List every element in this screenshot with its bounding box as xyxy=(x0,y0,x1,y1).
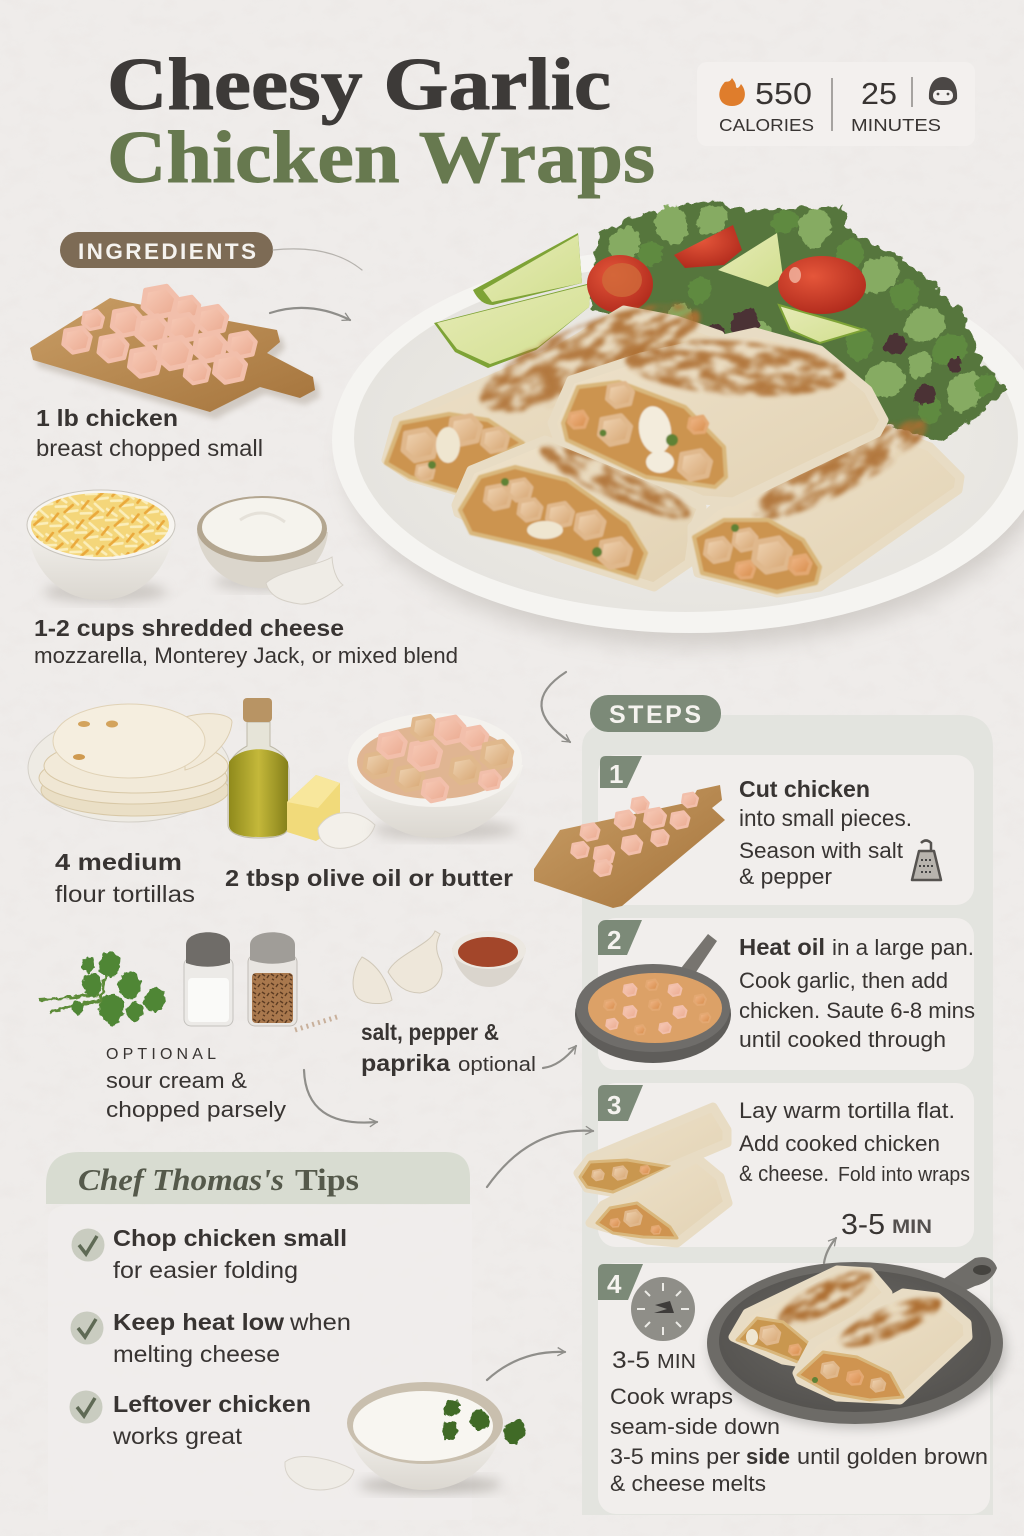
step 1 text: & pepper xyxy=(739,864,832,889)
step 2 text: Cook garlic, then add xyxy=(739,968,948,993)
label: cheese: mozzarella, Monterey Jack, or mixed blend xyxy=(34,643,458,668)
ingredients heading xyxy=(60,232,273,268)
arrow: seasoning to step 2 xyxy=(543,1046,576,1068)
step 2 text: in a large pan. xyxy=(832,935,974,960)
step 3 card xyxy=(578,1083,974,1247)
ingredient: bowl of chicken xyxy=(348,713,523,839)
wrap front right xyxy=(692,405,960,593)
label: seasoning: salt, pepper & xyxy=(361,1019,499,1045)
tips heading xyxy=(78,1162,359,1197)
wrap back centre xyxy=(552,332,884,502)
ingredient: garlic xyxy=(353,931,442,1004)
step 2 text: Heat oil xyxy=(739,934,825,960)
step 3 text: Lay warm tortilla flat. xyxy=(739,1098,955,1123)
step 1 card xyxy=(534,755,974,908)
minutes: MINUTES xyxy=(851,115,941,135)
arrow: step 4 to time xyxy=(824,1238,836,1263)
step 3 time: MIN xyxy=(892,1217,932,1238)
label: optional: sour cream & xyxy=(106,1068,247,1093)
label: seasoning xyxy=(361,1019,536,1076)
step 4 text: 3-5 mins per xyxy=(610,1444,740,1469)
arrow: chicken to plate xyxy=(270,308,350,320)
step 2 badge: 2 xyxy=(607,925,621,955)
ingredient: butter xyxy=(287,775,375,848)
tip 3: Leftover chicken xyxy=(113,1391,311,1417)
step 4 text: Cook wraps xyxy=(610,1384,733,1409)
icon: flame xyxy=(719,78,745,106)
title xyxy=(107,44,655,199)
step 2 card xyxy=(575,918,975,1070)
step 1 text xyxy=(739,776,912,889)
limes xyxy=(434,233,864,368)
ingredient: pepper shaker xyxy=(248,932,340,1030)
tips heading: Chef Thomas's xyxy=(78,1162,284,1197)
step 4 badge xyxy=(598,1264,643,1300)
label: seasoning: optional xyxy=(458,1054,536,1076)
ingredient: tortillas xyxy=(28,704,232,822)
minutes: 25 xyxy=(861,76,897,111)
step 3 text: & cheese. xyxy=(739,1161,829,1186)
ingredient: shredded cheese bowl xyxy=(27,490,175,602)
label: tortillas: 4 medium xyxy=(55,849,182,875)
step 2 pan xyxy=(575,934,731,1063)
step 2 text xyxy=(739,934,975,1052)
arrow: tips to step 4 xyxy=(487,1352,565,1380)
step 4 text: 3-5 xyxy=(612,1347,650,1374)
step 3 text xyxy=(739,1098,970,1186)
wrap back left xyxy=(386,282,720,492)
step 4 card xyxy=(598,1257,1006,1514)
label: oil or butter: 2 tbsp olive oil or butter xyxy=(225,865,513,891)
tip 2: melting cheese xyxy=(113,1341,280,1367)
salad xyxy=(590,198,1008,440)
label: seasoning: paprika xyxy=(361,1050,450,1076)
step 2 badge xyxy=(598,920,642,955)
step 3 time xyxy=(841,1209,932,1241)
step 3 text: Fold into wraps xyxy=(838,1163,970,1186)
step 3 badge xyxy=(598,1085,643,1121)
step 3 wraps xyxy=(578,1107,728,1243)
ingredient: sour cream bowl xyxy=(197,496,343,604)
step 1 badge xyxy=(600,756,642,789)
icon: chef head xyxy=(929,77,957,105)
ingredients heading: INGREDIENTS xyxy=(78,239,256,264)
calories: 550 xyxy=(755,76,812,111)
sour cream bowl with parsley xyxy=(285,1382,529,1493)
label: optional xyxy=(106,1046,286,1122)
ingredient: olive oil bottle xyxy=(228,698,289,838)
calories: CALORIES xyxy=(719,115,814,135)
label: tortillas xyxy=(55,849,195,907)
arrow: ingredients to plate xyxy=(273,249,362,270)
tomatoes xyxy=(587,225,866,314)
title: Chicken Wraps xyxy=(107,117,655,199)
wraps xyxy=(386,282,960,593)
step 4 text: MIN xyxy=(657,1351,696,1373)
tip 1 xyxy=(72,1225,347,1283)
step 4 wrap front xyxy=(797,1287,968,1400)
hero plate of wraps xyxy=(332,198,1024,647)
tips heading: Tips xyxy=(295,1162,359,1197)
label: cheese: 1-2 cups shredded cheese xyxy=(34,615,344,641)
step 1 text: Season with salt xyxy=(739,838,903,863)
steps heading xyxy=(590,695,721,732)
label: optional: OPTIONAL xyxy=(106,1046,216,1063)
step 4 text: & cheese melts xyxy=(610,1471,766,1496)
arrow: plate to steps xyxy=(541,672,570,742)
ingredient: paprika bowl xyxy=(452,931,526,987)
title: Cheesy Garlic xyxy=(107,44,611,126)
tip 1: for easier folding xyxy=(113,1257,298,1283)
steps panel xyxy=(534,695,1006,1515)
ingredient: salt shaker xyxy=(184,932,233,1026)
label: chicken xyxy=(36,405,263,461)
tip 3 xyxy=(70,1390,311,1449)
step 2 text: until cooked through xyxy=(739,1027,946,1052)
step 4 badge: 4 xyxy=(607,1269,622,1299)
step 2 text: chicken. Saute 6-8 mins xyxy=(739,998,975,1023)
step 3 time: 3-5 xyxy=(841,1209,885,1241)
step 4 text: side xyxy=(746,1444,790,1469)
tip 2 xyxy=(70,1309,351,1367)
step 4 text xyxy=(610,1347,988,1496)
label: optional: chopped parsely xyxy=(106,1097,286,1122)
label: cheese xyxy=(34,615,458,668)
step 3 badge: 3 xyxy=(607,1090,621,1120)
calories xyxy=(719,76,814,135)
step 1 text: Cut chicken xyxy=(739,776,870,802)
label: chicken: breast chopped small xyxy=(36,435,263,461)
label: tortillas: flour tortillas xyxy=(55,881,195,907)
step 3 text: Add cooked chicken xyxy=(739,1131,940,1156)
tip 3: works great xyxy=(112,1423,243,1449)
ingredient: parsley xyxy=(38,952,165,1026)
steps heading: STEPS xyxy=(609,701,701,729)
icon: salt shaker xyxy=(912,840,941,880)
tip 1: Chop chicken small xyxy=(113,1225,347,1251)
tip 2: Keep heat low xyxy=(113,1309,284,1335)
step 1 text: into small pieces. xyxy=(739,805,912,831)
step 1 board of chopped chicken xyxy=(534,785,725,908)
icon: timer xyxy=(631,1277,695,1341)
step 4 pan xyxy=(707,1257,1006,1428)
step 4 text: until golden brown xyxy=(797,1444,988,1469)
minutes xyxy=(851,76,941,135)
wrap front centre xyxy=(456,433,702,587)
step 1 badge: 1 xyxy=(609,759,623,789)
tip 2: when xyxy=(289,1309,351,1335)
arrow: optional to tips xyxy=(304,1070,377,1123)
stats panel xyxy=(697,62,975,146)
ingredient: chicken on board xyxy=(30,286,320,419)
label: chicken: 1 lb chicken xyxy=(36,405,178,431)
step 4 text: seam-side down xyxy=(610,1414,780,1439)
arrow: tips to step 3 xyxy=(487,1131,593,1187)
tips panel xyxy=(46,1152,529,1520)
step 4 wrap back xyxy=(733,1261,888,1363)
